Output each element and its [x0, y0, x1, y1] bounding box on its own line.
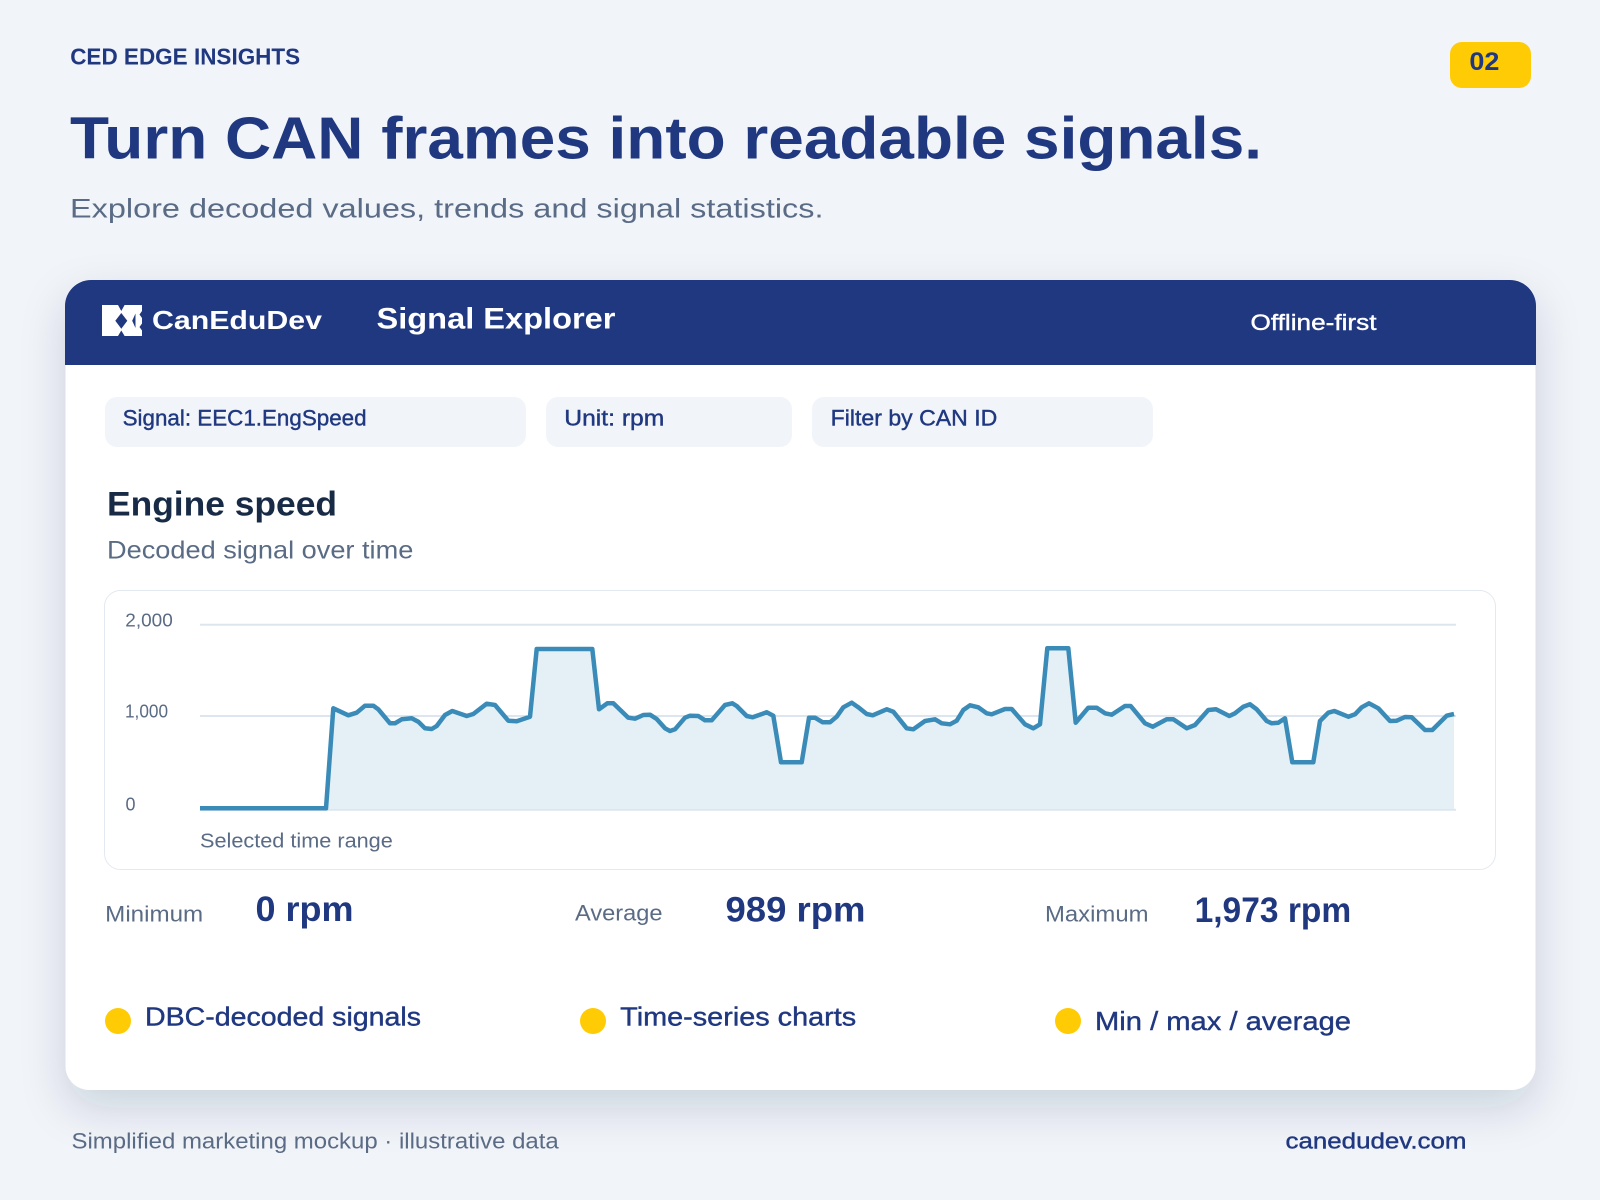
stat: maximum: 1,973 rpm: [1195, 891, 1351, 930]
app name: Signal Explorer: [376, 302, 616, 335]
stat: minimum: Minimum: [105, 902, 203, 927]
control: unit selector: Unit: rpm: [564, 406, 664, 431]
eyebrow: brand series: CED EDGE INSIGHTS: [70, 43, 300, 69]
page number badge: [1450, 42, 1531, 88]
stat: maximum: Maximum: [1045, 902, 1148, 927]
stat: minimum: 0 rpm: [256, 890, 354, 929]
footer note: Simplified marketing mockup · illustrative data: [72, 1129, 560, 1154]
icon: CanEduDev logo: [102, 305, 142, 336]
y-axis label 0: 0: [126, 794, 136, 815]
feature: DBC-decoded signals: DBC-decoded signals: [145, 1002, 421, 1032]
footer website: canedudev.com: [1286, 1129, 1466, 1154]
control: signal selector: Signal: EEC1.EngSpeed: [123, 406, 367, 431]
control: unit selector: [546, 397, 792, 447]
filter controls: [105, 397, 1153, 447]
control: CAN ID filter: Filter by CAN ID: [831, 406, 997, 431]
app header bar: [65, 280, 1536, 365]
control: signal selector: [105, 397, 526, 447]
y-axis label 2,000: 2,000: [125, 610, 173, 631]
control: CAN ID filter: [812, 397, 1153, 447]
area under signal: [326, 648, 1454, 809]
y-axis label 1,000: 1,000: [125, 701, 168, 722]
panel: signal explorer card: [65, 280, 1536, 1090]
title: Turn CAN frames into readable signals.: [70, 106, 1262, 172]
logo wordmark: CanEduDev: [152, 305, 323, 335]
x-axis caption: Selected time range: [200, 830, 393, 852]
subtitle: Explore decoded values, trends and signal statistics.: [70, 193, 824, 223]
chart heading: Engine speed: [107, 486, 337, 524]
stat: average: [575, 891, 866, 930]
feature: time-series charts: Time-series charts: [620, 1002, 856, 1032]
stat: average: 989 rpm: [726, 891, 866, 930]
line chart: engine speed: [104, 590, 1496, 870]
chart subheading: Decoded signal over time: [107, 536, 413, 564]
stat: average: Average: [575, 901, 662, 926]
stat: maximum: [1045, 891, 1351, 930]
feature: min / max / average: Min / max / average: [1095, 1006, 1351, 1036]
signal line: [200, 648, 1454, 808]
page number badge: 02: [1469, 48, 1499, 76]
stat: minimum: [105, 890, 354, 929]
offline-first label: Offline-first: [1250, 310, 1376, 335]
